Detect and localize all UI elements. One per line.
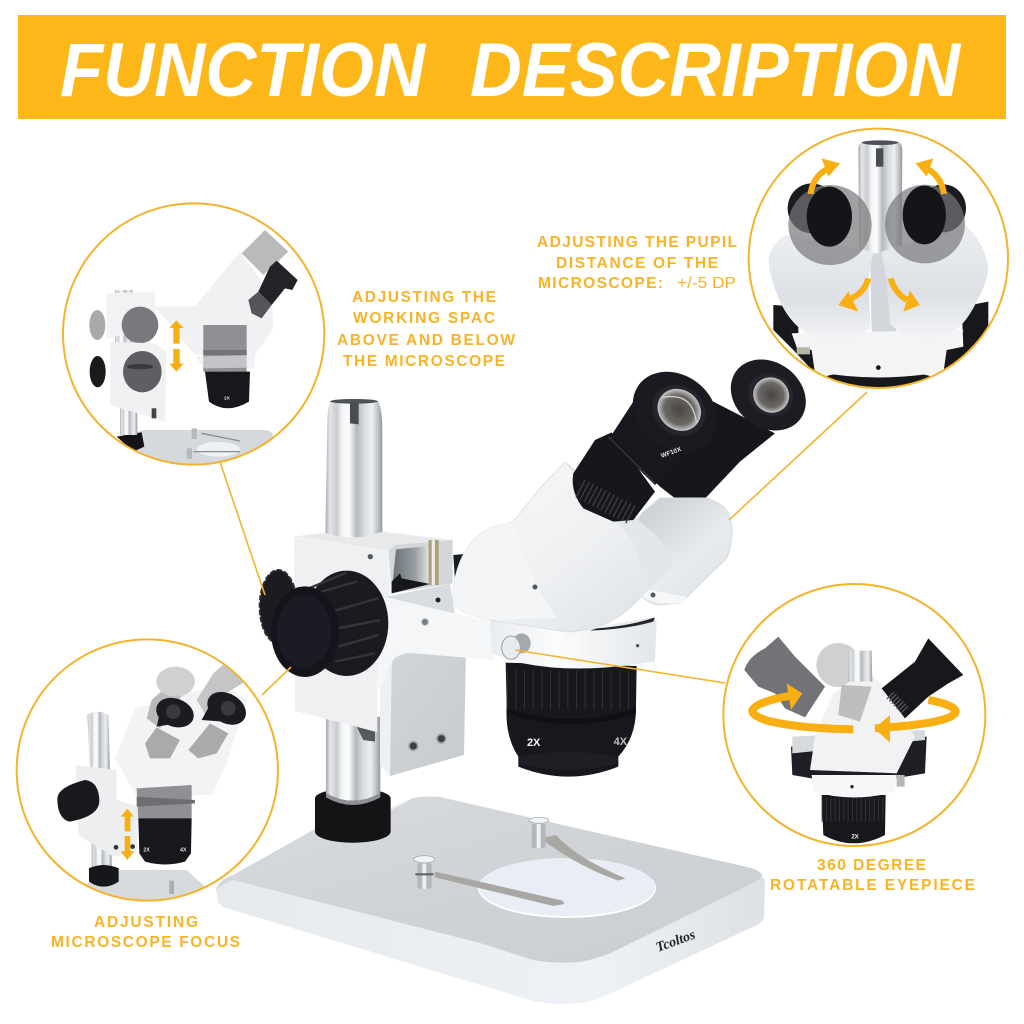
near eyepiece: WF10X — [660, 446, 683, 460]
objective: 4X — [180, 848, 187, 854]
label: working space: ABOVE AND BELOW — [337, 332, 515, 349]
leader lines — [220, 392, 867, 695]
logo: Tcoltos — [654, 928, 698, 956]
label: focus: ADJUSTING — [94, 914, 198, 931]
right body — [882, 225, 988, 340]
nosepiece — [797, 346, 947, 377]
stage clip front — [414, 856, 565, 906]
side knobs — [791, 737, 927, 778]
pillar — [858, 140, 902, 260]
eyepiece — [248, 261, 298, 318]
callout circle: pupil distance — [749, 129, 1008, 388]
left ghost eyepiece — [744, 637, 825, 717]
specimen plate — [478, 858, 656, 918]
title banner — [18, 15, 1006, 119]
base plate — [216, 797, 765, 1004]
label: rotation: 360 DEGREE — [817, 857, 926, 874]
nosepiece ring — [490, 617, 657, 668]
rotation arrows — [811, 168, 944, 300]
far eyepiece — [655, 345, 820, 507]
objective: 4X — [614, 736, 628, 748]
center ghost eyepiece — [810, 643, 915, 773]
near body — [453, 462, 668, 632]
right eyepiece — [885, 184, 966, 263]
label: rotation — [770, 857, 975, 894]
label: working space: WORKING SPAC — [353, 310, 495, 327]
objective — [822, 795, 886, 843]
base and stage — [116, 428, 274, 464]
block — [76, 765, 138, 857]
arrow ring — [752, 683, 956, 743]
title banner: DESCRIPTION — [470, 28, 962, 113]
label: working space: THE MICROSCOPE — [343, 353, 505, 370]
callout circle: rotation — [723, 584, 985, 846]
focus block — [294, 532, 465, 732]
title banner: FUNCTION — [60, 28, 427, 113]
double arrow — [121, 809, 134, 860]
knob — [57, 780, 99, 822]
label: working space: ADJUSTING THE — [352, 289, 496, 306]
main microscope — [216, 345, 820, 1004]
objective: 2X — [527, 737, 541, 749]
objective — [137, 785, 195, 864]
pillar — [87, 712, 110, 770]
focus block — [90, 342, 167, 422]
objective — [195, 325, 255, 408]
label: pupil distance: MICROSCOPE: — [538, 275, 663, 292]
lock screw — [502, 633, 531, 659]
far body — [610, 498, 732, 605]
arm — [378, 584, 495, 690]
callout circle: working space — [63, 203, 324, 472]
nosepiece ring — [812, 775, 905, 797]
label: pupil distance: +/-5 DP — [677, 275, 736, 292]
label: pupil distance: ADJUSTING THE PUPIL — [537, 234, 737, 251]
black eyepieces — [156, 692, 246, 728]
stage clip rear — [529, 817, 626, 881]
ghost head — [89, 230, 288, 355]
near eyepiece — [573, 355, 733, 522]
rear knobs — [773, 302, 988, 387]
label: pupil distance: DISTANCE OF THE — [556, 255, 718, 272]
collar — [89, 865, 119, 887]
label: focus: MICROSCOPE FOCUS — [51, 934, 240, 951]
objective: 2X — [143, 848, 150, 854]
left body — [768, 235, 873, 342]
left eyepiece — [788, 183, 872, 265]
label: focus — [51, 914, 240, 951]
right black eyepiece — [882, 638, 963, 718]
objective — [506, 663, 637, 777]
label: pupil distance — [537, 234, 737, 292]
objective: 2X — [224, 396, 231, 401]
bracket — [380, 652, 466, 776]
upper pillar — [325, 399, 382, 539]
objective: 2X — [851, 834, 859, 840]
stage — [86, 870, 204, 900]
slot window — [392, 540, 439, 593]
callout circle: focus — [17, 639, 278, 907]
double arrow — [169, 320, 184, 372]
focus knob — [260, 570, 388, 677]
lower pillar and collar — [315, 717, 391, 843]
label: working space — [337, 289, 515, 370]
ghost head — [115, 662, 247, 797]
label: rotation: ROTATABLE EYEPIECE — [770, 877, 975, 894]
